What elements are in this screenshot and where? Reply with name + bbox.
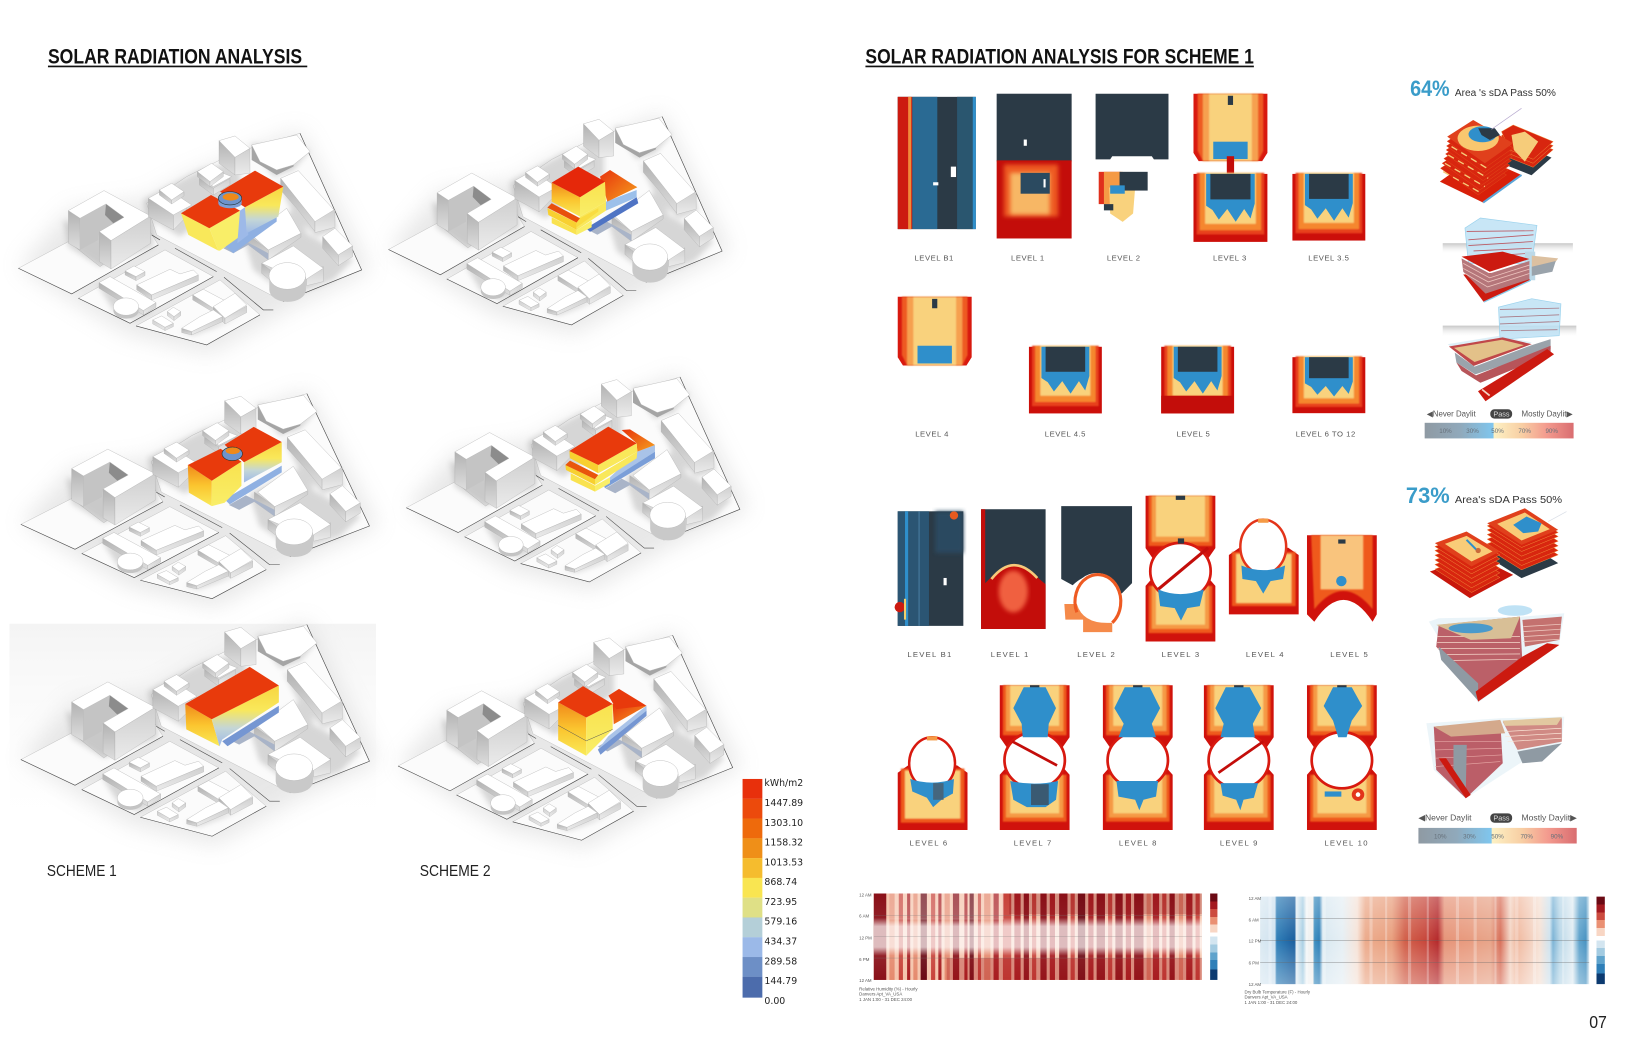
legend: scheme 1 daylight: 50% bbox=[1491, 428, 1504, 435]
chart: dry bulb temperature heatmap: Danvers Apt_VA_USA bbox=[1245, 995, 1288, 1000]
chart: relative humidity heatmap: 6 AM bbox=[859, 913, 869, 918]
labels: scheme 1 levels: LEVEL 5 bbox=[1177, 429, 1210, 438]
labels: scheme 1 levels: LEVEL 1 bbox=[1011, 253, 1045, 262]
chart: dry bulb temperature heatmap: 1 JAN 1:00 - 31 DEC 24:00 bbox=[1245, 1000, 1298, 1005]
plan: level 1 bbox=[997, 94, 1072, 238]
legend: radiation scale: 579.16 bbox=[764, 917, 797, 928]
legend: scheme 2 daylight: Pass bbox=[1493, 814, 1510, 823]
labels: scheme 2 levels: LEVEL 8 bbox=[1119, 839, 1158, 848]
legend: scheme 1 daylight: 10% bbox=[1439, 428, 1452, 435]
labels: scheme 1 levels: LEVEL B1 bbox=[914, 253, 954, 262]
legend: radiation scale: 1158.32 bbox=[764, 838, 803, 849]
3D stack: scheme 2 top view bbox=[1430, 508, 1567, 598]
legend: scheme 1 daylight: 30% bbox=[1466, 428, 1479, 435]
legend: radiation scale bbox=[743, 778, 803, 1007]
chart: relative humidity heatmap: 12 PM bbox=[859, 935, 872, 940]
plan: level B1 bbox=[898, 97, 976, 229]
legend: scheme 2 daylight: 70% bbox=[1520, 833, 1533, 840]
heading: analysis for scheme 1: SOLAR RADIATION ANALYSIS FOR SCHEME 1 bbox=[865, 46, 1254, 69]
solar massing: scheme 1 view A bbox=[181, 171, 283, 253]
callout: 64 percent sDA: 64% bbox=[1410, 76, 1450, 101]
plan: level 4 bbox=[1229, 519, 1299, 614]
panel: scheme 2 daylight plans bbox=[895, 496, 1377, 848]
labels: scheme 2 levels: LEVEL 10 bbox=[1324, 839, 1369, 848]
legend: scheme 2 daylight: ◀Never Daylit bbox=[1418, 813, 1472, 823]
chart: dry bulb temperature heatmap: 6 AM bbox=[1249, 918, 1259, 923]
labels: scheme 2 levels: LEVEL 6 bbox=[910, 839, 948, 848]
legend: radiation scale: 144.79 bbox=[764, 976, 797, 987]
chart: dry bulb temperature heatmap: 12 PM bbox=[1249, 938, 1262, 943]
legend: radiation scale: 0.00 bbox=[764, 996, 785, 1007]
legend: scheme 1 daylight: Pass bbox=[1493, 410, 1510, 419]
chart: dry bulb temperature heatmap: Dry Bulb Temperature (F) - Hourly bbox=[1245, 989, 1311, 994]
plan: level 8 bbox=[1103, 685, 1173, 830]
legend: scheme 2 daylight bbox=[1418, 813, 1577, 844]
labels: scheme 1 levels bbox=[914, 253, 1356, 438]
legend: radiation scale: 1013.53 bbox=[764, 857, 803, 868]
legend: radiation scale: 1447.89 bbox=[764, 798, 803, 809]
site model: scheme 1 view A bbox=[18, 130, 370, 353]
labels: scheme 2 levels bbox=[907, 650, 1369, 848]
labels: scheme 2 levels: LEVEL 3 bbox=[1162, 650, 1200, 659]
plan: level B1 bbox=[895, 511, 963, 626]
labels: scheme 2 levels: LEVEL 1 bbox=[991, 650, 1030, 659]
legend: scheme 1 daylight bbox=[1425, 409, 1574, 438]
solar massing: scheme 1 view C bbox=[185, 667, 279, 746]
labels: scheme 2 levels: LEVEL 9 bbox=[1220, 839, 1259, 848]
3D stack: scheme 1 top view bbox=[1440, 108, 1553, 203]
plan: level 4.5 bbox=[1029, 346, 1102, 413]
legend: scheme 2 daylight: 30% bbox=[1463, 833, 1476, 840]
callout: 64 percent sDA: Area 's sDA Pass 50% bbox=[1455, 88, 1556, 99]
legend: radiation scale: kWh/m2 bbox=[764, 778, 803, 789]
legend: radiation scale: 1303.10 bbox=[764, 818, 803, 829]
legend: radiation scale: 289.58 bbox=[764, 956, 797, 967]
3D stack: scheme 2 middle view bbox=[1429, 605, 1564, 703]
legend: radiation scale: 868.74 bbox=[764, 877, 797, 888]
solar massing: scheme 2 view B bbox=[565, 427, 655, 492]
chart: relative humidity heatmap: 6 PM bbox=[859, 957, 870, 962]
site model: scheme 1 view B bbox=[21, 390, 378, 607]
chart: relative humidity heatmap bbox=[859, 893, 1217, 1002]
legend: radiation scale: 723.95 bbox=[764, 897, 797, 908]
chart: relative humidity heatmap: 12 AM bbox=[859, 978, 872, 983]
legend: scheme 2 daylight: 10% bbox=[1434, 833, 1447, 840]
site model: scheme 2 view B bbox=[406, 374, 748, 590]
plan: level 7 bbox=[1000, 685, 1070, 830]
plan: level 4 bbox=[898, 297, 972, 366]
labels: scheme 1 levels: LEVEL 3.5 bbox=[1308, 253, 1349, 262]
plan: level 3.5 bbox=[1292, 173, 1365, 241]
callout: 64 percent sDA bbox=[1410, 76, 1556, 101]
chart: relative humidity heatmap: 1 JAN 1:00 - 31 DEC 24:00 bbox=[859, 997, 913, 1002]
caption: scheme 1: SCHEME 1 bbox=[47, 863, 117, 880]
labels: scheme 2 levels: LEVEL B1 bbox=[907, 650, 953, 659]
labels: scheme 2 levels: LEVEL 5 bbox=[1330, 650, 1369, 659]
labels: scheme 2 levels: LEVEL 4 bbox=[1246, 650, 1285, 659]
plan: level 5 bbox=[1161, 346, 1234, 413]
legend: scheme 1 daylight: 90% bbox=[1545, 428, 1558, 435]
callout: 73 percent sDA: 73% bbox=[1406, 483, 1450, 508]
plan: level 9 bbox=[1204, 685, 1274, 830]
3D stack: scheme 1 lower view bbox=[1443, 299, 1576, 401]
plan: level 3 bbox=[1193, 94, 1267, 242]
chart: dry bulb temperature heatmap bbox=[1245, 896, 1605, 1005]
3D stack: scheme 1 middle view bbox=[1443, 218, 1573, 302]
plan: level 3 bbox=[1146, 496, 1215, 641]
callout: 73 percent sDA: Area's sDA Pass 50% bbox=[1455, 495, 1562, 506]
callout: 73 percent sDA bbox=[1406, 483, 1562, 508]
chart: dry bulb temperature heatmap: 12 AM bbox=[1249, 896, 1261, 901]
plan: level 2 bbox=[1096, 94, 1168, 222]
legend: scheme 1 daylight: Mostly Daylit▶ bbox=[1522, 410, 1573, 419]
labels: scheme 1 levels: LEVEL 2 bbox=[1107, 253, 1141, 262]
3D stack: scheme 2 lower view bbox=[1426, 717, 1564, 798]
panel: scheme 1 daylight plans bbox=[898, 94, 1365, 438]
site model: scheme 2 view C bbox=[398, 632, 741, 848]
chart: dry bulb temperature heatmap: 12 AM bbox=[1249, 982, 1261, 987]
legend: scheme 2 daylight: 90% bbox=[1551, 833, 1564, 840]
solar massing: scheme 1 view B bbox=[188, 427, 282, 506]
plan: level 2 bbox=[1061, 506, 1132, 632]
plan: level 10 bbox=[1307, 685, 1377, 830]
page number: 07 bbox=[1589, 1012, 1607, 1032]
legend: scheme 2 daylight: 50% bbox=[1491, 833, 1504, 840]
chart: relative humidity heatmap: Danvers Apt_VA_USA bbox=[859, 992, 902, 997]
legend: scheme 1 daylight: 70% bbox=[1518, 428, 1531, 435]
legend: scheme 2 daylight: Mostly Daylit▶ bbox=[1522, 813, 1577, 823]
legend: scheme 1 daylight: ◀Never Daylit bbox=[1427, 410, 1476, 419]
plan: level 6 bbox=[898, 736, 968, 830]
chart: relative humidity heatmap: 12 AM bbox=[859, 893, 872, 898]
labels: scheme 1 levels: LEVEL 4.5 bbox=[1045, 429, 1086, 438]
labels: scheme 2 levels: LEVEL 7 bbox=[1014, 839, 1053, 848]
labels: scheme 1 levels: LEVEL 3 bbox=[1213, 253, 1247, 262]
labels: scheme 1 levels: LEVEL 6 TO 12 bbox=[1296, 429, 1356, 438]
labels: scheme 2 levels: LEVEL 2 bbox=[1077, 650, 1116, 659]
chart: relative humidity heatmap: Relative Humidity (%) - Hourly bbox=[859, 986, 918, 991]
labels: scheme 1 levels: LEVEL 4 bbox=[915, 429, 949, 438]
plan: level 6 to 12 bbox=[1292, 356, 1365, 413]
solar massing: scheme 2 view C bbox=[558, 686, 647, 756]
legend: radiation scale: 434.37 bbox=[764, 937, 797, 948]
caption: scheme 2: SCHEME 2 bbox=[420, 863, 491, 880]
heading: solar radiation analysis: SOLAR RADIATION ANALYSIS bbox=[48, 46, 302, 69]
solar massing: scheme 2 view A bbox=[547, 167, 638, 235]
site model: scheme 2 view A bbox=[388, 113, 730, 333]
site model: scheme 1 view C bbox=[9, 621, 378, 845]
plan: level 1 bbox=[981, 509, 1046, 629]
plan: level 5 bbox=[1307, 535, 1377, 622]
chart: dry bulb temperature heatmap: 6 PM bbox=[1249, 960, 1259, 965]
